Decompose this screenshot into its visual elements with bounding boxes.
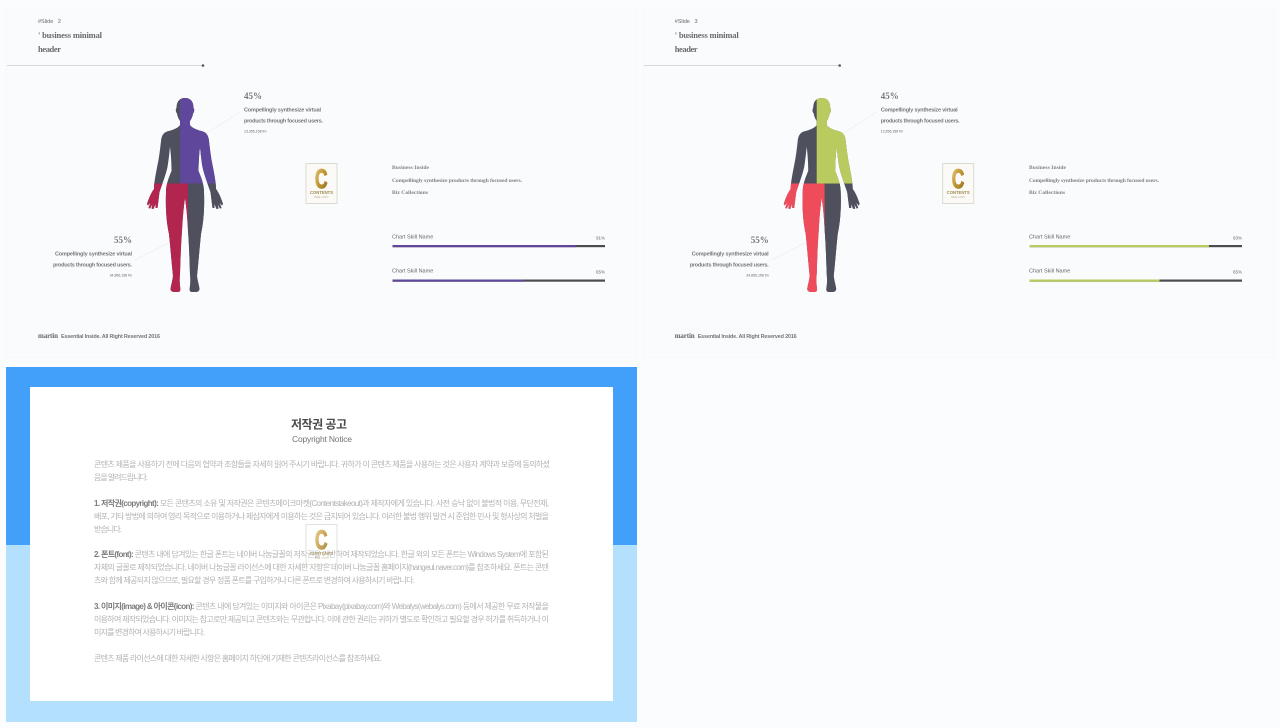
bar: skill 2: 65%	[1233, 270, 1242, 274]
logo	[306, 164, 337, 204]
callout: 55%	[53, 235, 168, 278]
callout: 55%: products through focused users.	[53, 262, 132, 268]
bar: skill 1: Chart Skill Name	[1029, 234, 1070, 240]
callout: 55%: Compellingly synthesize virtual	[692, 252, 769, 258]
panel: slide 2	[7, 19, 605, 339]
callout: 55%: 34,856,158 fm	[746, 274, 769, 278]
logo: C	[952, 164, 964, 194]
logo watermark	[306, 524, 337, 564]
callout: 45%: 13,356,158 fm	[244, 130, 266, 134]
bar: skill 2	[392, 268, 605, 282]
footer	[675, 332, 797, 340]
slide 3 header: header	[675, 44, 698, 54]
notice intro	[94, 459, 551, 482]
footer	[38, 332, 160, 340]
notice title	[291, 416, 352, 444]
callout: 55%	[690, 235, 805, 278]
callout: 45%	[207, 91, 323, 134]
callout: 45%: 45%	[244, 91, 262, 101]
callout: 55%: Compellingly synthesize virtual	[55, 252, 132, 258]
text block: business inside: Biz Collections	[392, 190, 428, 196]
slide 3 header: ' business minimal	[675, 30, 739, 40]
logo watermark: REAL COPY	[314, 557, 329, 560]
slide 2 header: #Slide 2	[38, 19, 61, 25]
notice intro: 콘텐츠 제품을 사용하기 전에 다음의 협약과 조항들을 자세히 읽어 주시기 바랍니다. 귀하가 이 콘텐츠 제품을 사용하는 것은 사용자 계약과 보증에 동의하셨	[94, 459, 551, 469]
bar: skill 1: 93%	[1233, 236, 1242, 240]
bar: skill 1: 91%	[596, 236, 605, 240]
footer: Essential Inside. All Right Reserved 2016	[61, 334, 160, 340]
text block: business inside: Business Inside	[1029, 165, 1067, 171]
footer: Essential Inside. All Right Reserved 2016	[698, 334, 797, 340]
text block: business inside: Compellingly synthesize products through focused users.	[1029, 178, 1160, 184]
notice clause 1	[94, 498, 549, 534]
panel: copyright notice	[6, 367, 637, 722]
notice clause 3	[94, 601, 549, 637]
text block: business inside	[1029, 165, 1160, 196]
bar: skill 2	[1029, 268, 1242, 282]
text block: business inside: Biz Collections	[1029, 190, 1065, 196]
logo: C	[315, 164, 328, 194]
text block: business inside	[392, 165, 523, 196]
callout: 45%: 13,356,158 fm	[881, 130, 903, 134]
callout: 45%	[844, 91, 960, 134]
notice clause 2	[94, 549, 549, 585]
notice title: Copyright Notice	[292, 434, 352, 444]
notice intro: 음을 알려드립니다.	[94, 472, 148, 482]
bar: skill 2: 65%	[596, 270, 605, 274]
logo watermark: CONTENTS	[310, 551, 333, 556]
human body chart	[784, 98, 860, 292]
callout: 55%: 55%	[114, 235, 132, 245]
notice clause 3: 미지를 변경하여 사용하시기 바랍니다.	[94, 627, 205, 637]
footer: martin	[675, 332, 695, 340]
logo: CONTENTS	[310, 190, 333, 195]
slide 2 header	[7, 19, 204, 67]
callout: 45%: 45%	[881, 91, 899, 101]
logo: REAL COPY	[314, 196, 329, 199]
notice title: 저작권 공고	[291, 416, 347, 432]
logo: CONTENTS	[947, 190, 970, 195]
notice clause 1: 1. 저작권(copyright): 모든 콘텐츠의 소유 및 저작권은 콘텐츠메이크마켓(Contentstakeout)과 제작자에게 있습니다. 사전 승낙 없이 불법적 이용, 무단전재,	[94, 498, 549, 508]
bar: skill 1	[392, 234, 605, 247]
callout: 45%: products through focused users.	[881, 118, 960, 124]
human body chart	[147, 98, 223, 292]
slide 2 header: ' business minimal	[38, 30, 103, 40]
callout: 55%: products through focused users.	[690, 262, 769, 268]
logo: REAL COPY	[951, 196, 966, 199]
bar: skill 2: Chart Skill Name	[1029, 268, 1070, 274]
slide 3 header	[644, 19, 841, 67]
text block: business inside: Compellingly synthesize products through focused users.	[392, 178, 523, 184]
callout: 45%: Compellingly synthesize virtual	[881, 108, 958, 114]
notice clause 3: 이용하여 제작되었습니다. 이미지는 참고로만 제공되고 콘텐츠와는 무관합니다. 이에 관한 권리는 귀하가 별도로 확인하고 필요할 경우 허가를 취득하거나 이	[94, 614, 549, 624]
callout: 55%: 55%	[751, 235, 769, 245]
logo	[943, 164, 974, 204]
panel: slide 3	[644, 19, 1242, 339]
notice clause 1: 받습니다.	[94, 524, 122, 534]
slide 2 header: header	[38, 44, 61, 54]
notice clause 3: 3. 이미지(image) & 아이콘(icon): 콘텐츠 내에 담겨있는 이미지와 아이콘은 Pixabay(pixabay.com)와 Webalys(webalys.com) 등에서 제공한 무료 저작물을	[94, 601, 549, 611]
logo watermark: C	[315, 525, 328, 555]
callout: 55%: 34,856,158 fm	[110, 274, 132, 278]
bar: skill 2: Chart Skill Name	[392, 268, 433, 274]
bar: skill 1	[1029, 234, 1242, 247]
text block: business inside: Business Inside	[392, 165, 430, 171]
slide 3 header: #Slide 3	[675, 19, 698, 25]
notice clause 2: 츠와 함께 제공되지 않으므로, 필요할 경우 정품 폰트를 구입하거나 다른 폰트로 변경하여 사용하시기 바랍니다.	[94, 575, 415, 585]
notice clause 2: 자체의 글꼴로 제작되었습니다. 네이버 나눔글꼴 라이선스에 대한 자세한 사항은 네이버 나눔글꼴 홈페이지(hangeul.naver.com)를 참조하세요. 폰트는 콘텐	[94, 562, 549, 572]
footer: martin	[38, 332, 58, 340]
notice clause 1: 배포, 기타 방법에 의하여 영리 목적으로 이용하거나 제삼자에게 이용하는 것은 금지되어 있습니다. 이러한 불법 행위 발견 시 준엄한 민사 및 형사상의 처벌을	[94, 511, 549, 521]
bar: skill 1: Chart Skill Name	[392, 234, 433, 240]
notice clause 2: 2. 폰트(font): 콘텐츠 내에 담겨있는 한글 폰트는 네이버 나눔글꼴의 저작권을 기반하여 제작되었습니다. 한글 외의 모든 폰트는 Windows System에 포함된	[94, 549, 549, 559]
callout: 45%: products through focused users.	[244, 118, 323, 124]
notice closing line: 콘텐츠 제품 라이선스에 대한 자세한 사항은 홈페이지 하단에 기재한 콘텐츠라이선스를 참조하세요.	[94, 653, 382, 663]
callout: 45%: Compellingly synthesize virtual	[244, 108, 321, 114]
